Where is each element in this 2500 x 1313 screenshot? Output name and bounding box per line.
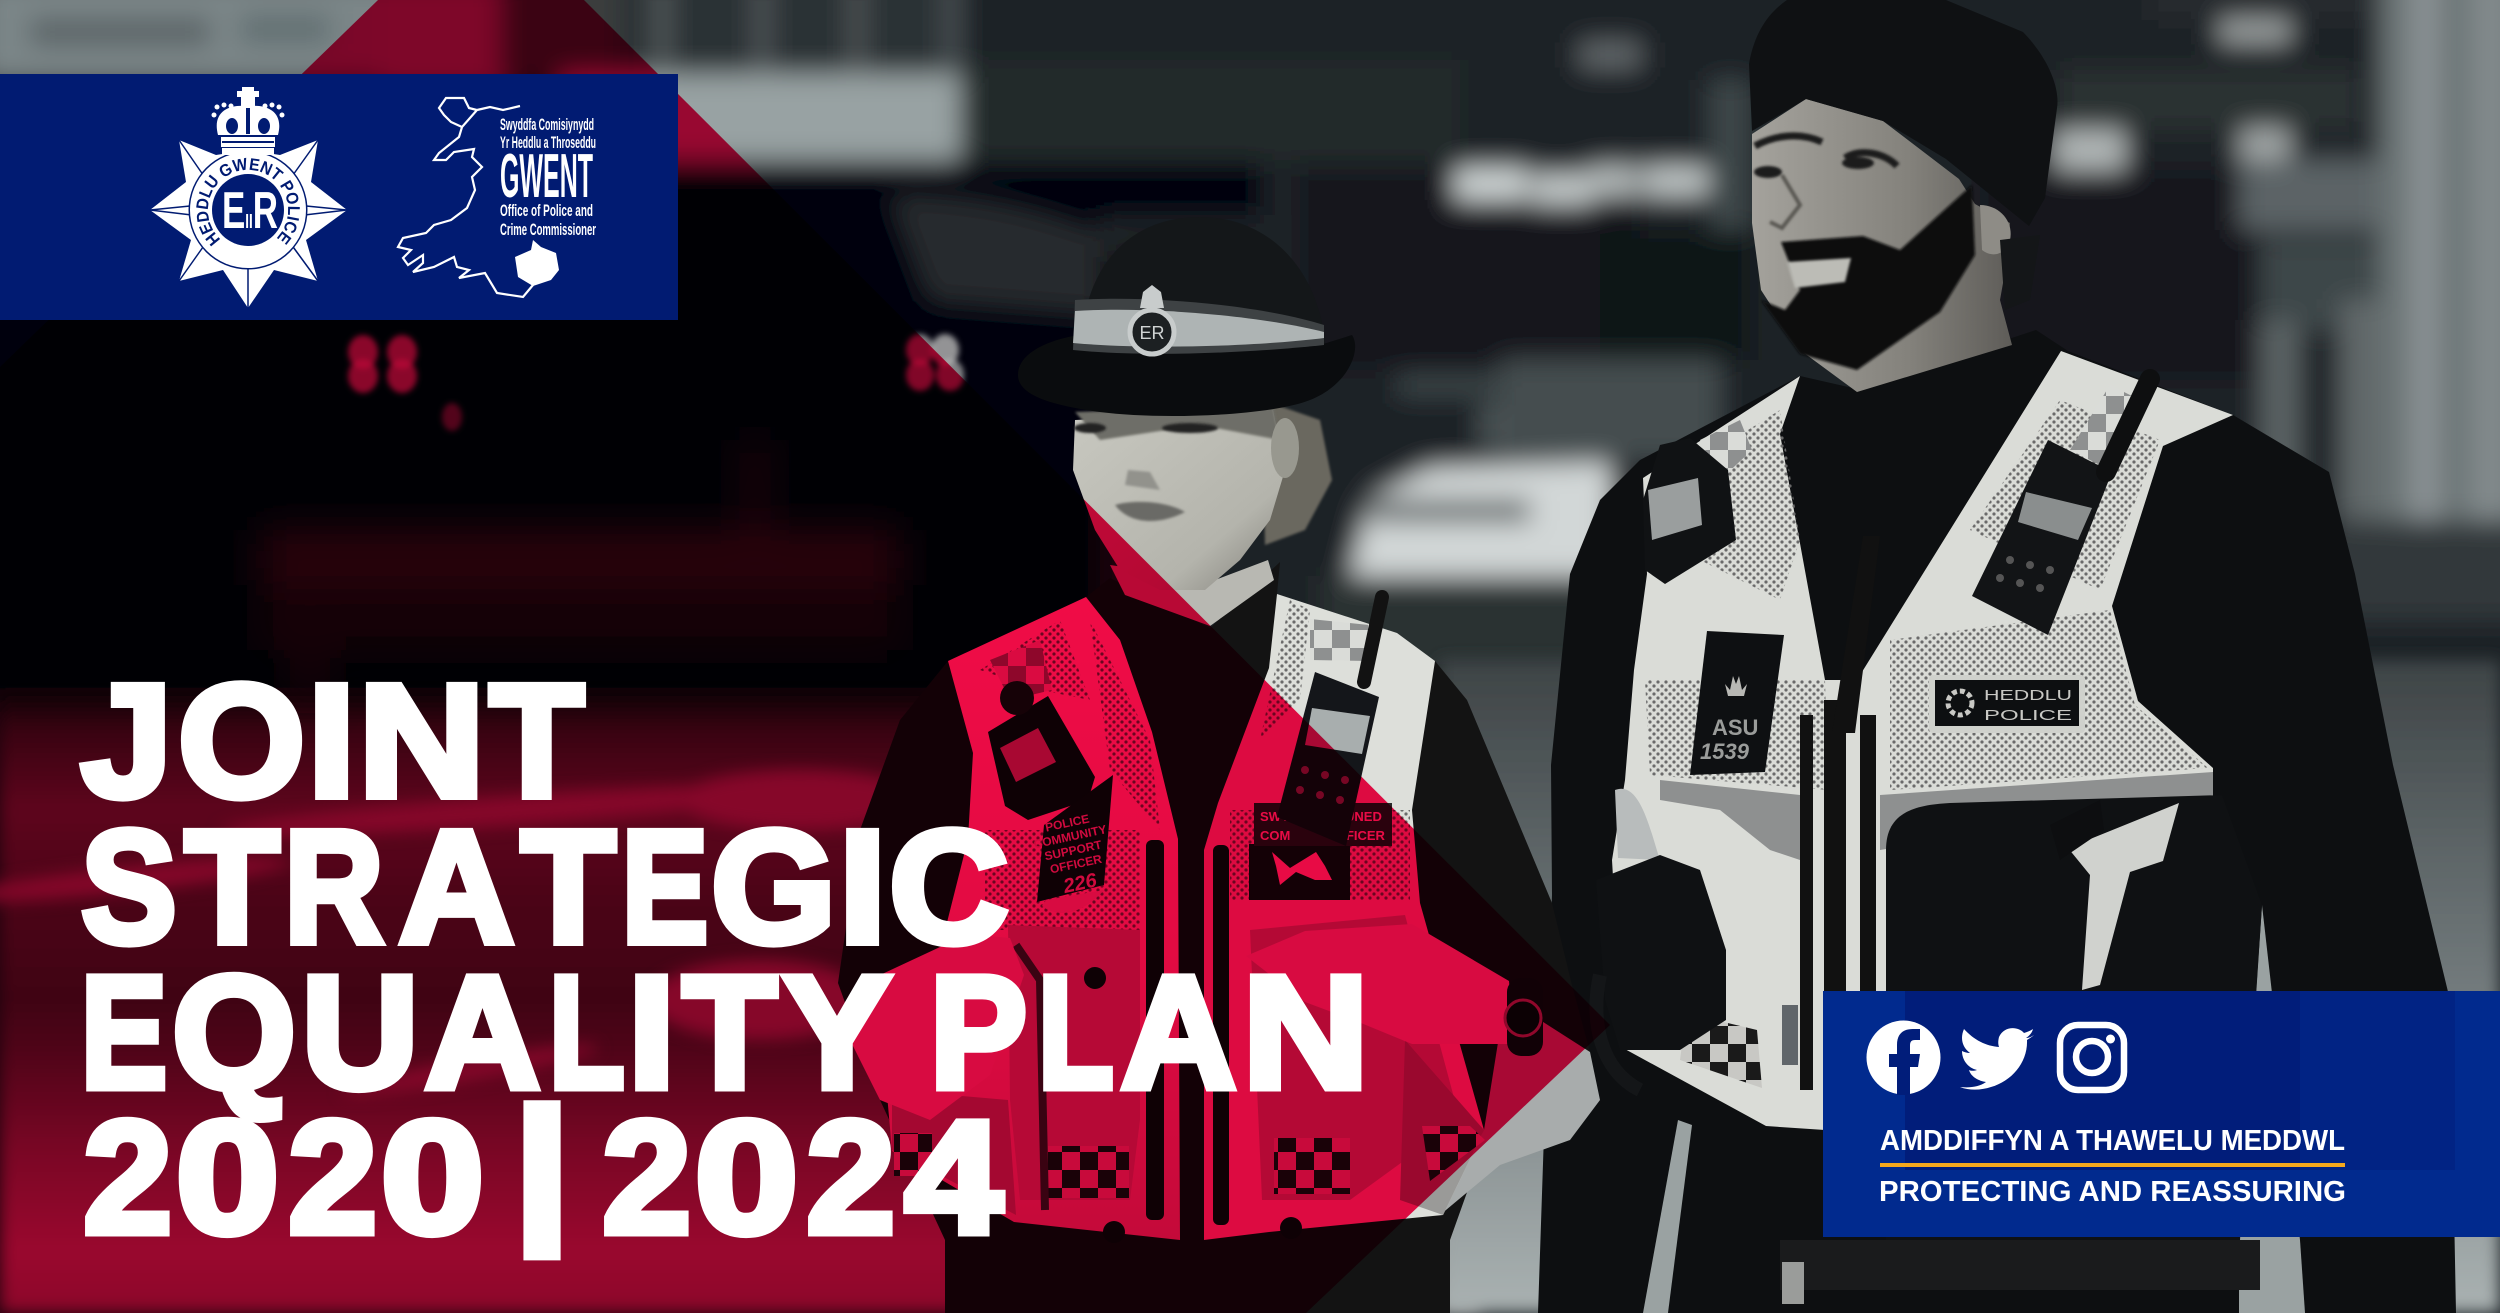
left hand — [850, 934, 1024, 1120]
checker — [1680, 1013, 1762, 1088]
checker patches — [1048, 1146, 1129, 1198]
title: | — [521, 1082, 563, 1252]
radio — [1972, 379, 2150, 635]
PCSO tab: SUPPORT — [1043, 837, 1104, 863]
ASU badge: 1539 — [1700, 739, 1750, 764]
hip — [1440, 1020, 1600, 1215]
body camera — [1643, 438, 1736, 584]
ASU badge — [1690, 631, 1784, 775]
title: T — [185, 797, 279, 976]
right hand — [1246, 924, 1514, 1044]
title: I — [308, 651, 355, 830]
woman face — [1073, 405, 1299, 590]
title: J — [81, 651, 172, 830]
name patch: SWYDDOG — [1260, 809, 1329, 824]
title: 0 — [695, 1088, 798, 1266]
body camera — [988, 681, 1095, 820]
title: I — [628, 942, 675, 1122]
PCSO tab: COMMUNITY — [1032, 822, 1108, 851]
title: 0 — [176, 1088, 279, 1266]
panel: logos: GWENT — [500, 142, 593, 211]
title: E — [622, 797, 708, 976]
title: 4 — [905, 1088, 1002, 1266]
man body — [1538, 330, 2456, 1313]
title: P — [930, 942, 1027, 1122]
title: Y — [783, 942, 891, 1122]
hat badge: ER — [1139, 323, 1165, 343]
title: I — [839, 797, 886, 976]
title: 2 — [288, 1088, 377, 1266]
officer: woman — [838, 217, 1600, 1313]
strapline: English: PROTECTING AND REASSURING — [1879, 1176, 2346, 1208]
Welsh dragon patch — [1249, 844, 1350, 900]
Heddlu Police badge: POLICE — [1984, 707, 2072, 724]
hat badge — [1130, 285, 1174, 354]
PCSO tab — [1030, 775, 1119, 913]
heading: commissioner logo text: Crime Commissioner — [500, 220, 596, 239]
red diagonal overlay — [0, 0, 1610, 1313]
title: T — [521, 797, 615, 976]
name patch: COM — [1260, 828, 1290, 843]
woman torso and arms — [838, 562, 1590, 1313]
title: R — [284, 797, 383, 976]
title: A — [425, 942, 540, 1122]
pocket strap — [1016, 945, 1045, 1210]
heading: commissioner logo text — [500, 115, 596, 239]
belt — [1780, 1240, 2260, 1304]
title: N — [1243, 942, 1369, 1122]
title: A — [399, 797, 514, 976]
zip stripes — [1800, 536, 1880, 1100]
radio — [1277, 597, 1382, 846]
title: U — [302, 942, 419, 1122]
panel: logos — [0, 74, 678, 320]
title: L — [1038, 942, 1114, 1122]
pouch — [1886, 795, 2262, 1240]
title: 2 — [602, 1088, 691, 1266]
icon: map of Wales — [398, 98, 559, 297]
panel: social and strapline — [1823, 991, 2500, 1237]
title: 2 — [806, 1088, 895, 1266]
crown — [212, 87, 284, 155]
grip — [2068, 803, 2179, 990]
vest — [887, 594, 1485, 1243]
title: O — [178, 651, 305, 830]
Heddlu Police badge — [1929, 675, 2085, 733]
name patch — [1254, 803, 1392, 846]
name patch: UNED — [1345, 809, 1382, 824]
ASU badge: ASU — [1712, 715, 1758, 740]
Heddlu Police badge: HEDDLU — [1984, 687, 2072, 704]
background lights — [348, 334, 964, 431]
heading: commissioner logo text: Swyddfa Comisiynydd — [500, 115, 594, 134]
man head — [1752, 99, 2040, 392]
holster — [1596, 855, 1726, 1090]
zips — [1146, 840, 1229, 1225]
hair — [1262, 400, 1332, 545]
title: C — [889, 797, 1008, 976]
lower pockets — [1008, 925, 1140, 1200]
ground with streaks — [0, 660, 2500, 1313]
title: T — [683, 942, 777, 1122]
icon: instagram — [2060, 1025, 2124, 1090]
icon: facebook — [1866, 1020, 1940, 1095]
heading: commissioner logo text: Office of Police and — [500, 201, 593, 220]
PCSO tab: POLICE — [1044, 812, 1091, 835]
icon: Gwent Police badge: EIIR — [222, 182, 278, 240]
name patch: FFICER — [1338, 828, 1386, 843]
title: N — [359, 651, 485, 830]
PCSO tab: 226 — [1061, 869, 1100, 898]
turban — [1749, 0, 2058, 226]
title: S — [81, 797, 177, 976]
icon: Gwent Police badge — [150, 87, 346, 308]
hedge — [260, 440, 900, 700]
title: G — [711, 797, 836, 976]
reflective strip — [1660, 780, 1800, 860]
title: 0 — [381, 1088, 484, 1266]
officer: man — [1538, 0, 2456, 1313]
title: E — [81, 942, 167, 1122]
title: T — [490, 651, 584, 830]
neck — [1110, 560, 1274, 626]
gaps of ground — [1643, 905, 2305, 1313]
watch — [1505, 978, 1543, 1056]
heading: commissioner logo text: Yr Heddlu a Throseddu — [500, 133, 596, 152]
title — [81, 651, 1369, 1266]
title: Q — [172, 942, 296, 1122]
icon: twitter — [1960, 1028, 2034, 1090]
divider — [1880, 1163, 2345, 1167]
man vest — [1612, 351, 2262, 1240]
title: L — [549, 942, 625, 1122]
title: A — [1121, 942, 1236, 1122]
PCSO tab: OFFICER — [1049, 852, 1103, 876]
title: 2 — [84, 1088, 172, 1266]
icon: Gwent Police badge: HEDDLU GWENT POLICE — [196, 158, 300, 246]
hat — [1018, 217, 1355, 416]
strapline: Welsh: AMDDIFFYN A THAWELU MEDDWL — [1880, 1125, 2345, 1157]
